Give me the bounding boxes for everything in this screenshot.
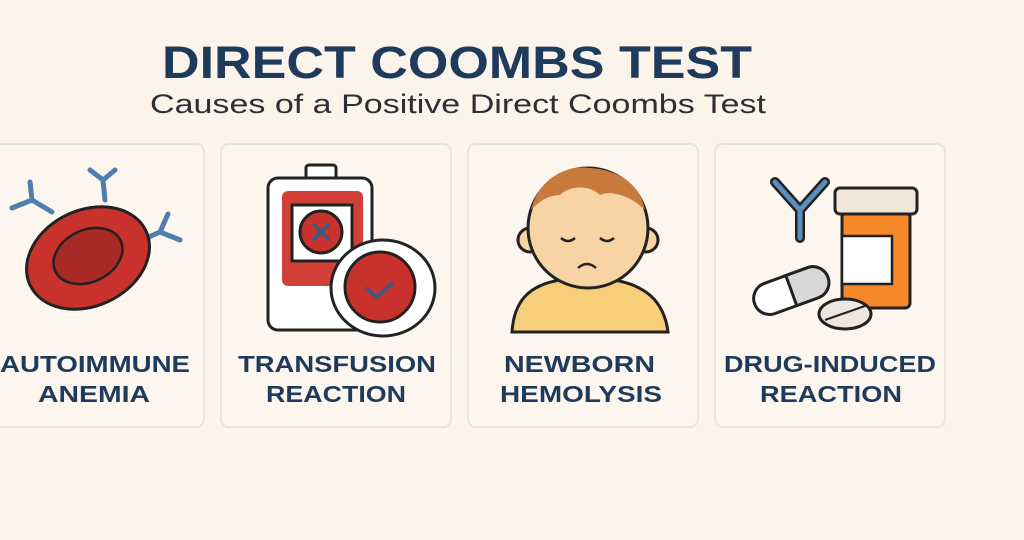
- label: DRUG-INDUCED: [724, 351, 936, 377]
- label: REACTION: [266, 381, 406, 407]
- subtitle: Causes of a Positive Direct Coombs Test: [150, 89, 767, 119]
- panel: transfusion reaction: [221, 144, 451, 427]
- label: ANEMIA: [38, 381, 150, 407]
- panel: drug-induced reaction: [715, 144, 945, 427]
- label: REACTION: [760, 381, 902, 407]
- icon: blood bag and cell: [268, 165, 435, 336]
- label: [238, 351, 436, 407]
- panel: autoimmune anemia: [0, 144, 204, 427]
- label: [500, 351, 662, 407]
- label: [0, 351, 190, 407]
- icon: baby: [512, 167, 668, 332]
- label: TRANSFUSION: [238, 351, 436, 377]
- label: NEWBORN: [504, 351, 655, 377]
- label: [724, 351, 936, 407]
- icon: red blood cell with antibodies: [10, 170, 180, 329]
- label: HEMOLYSIS: [500, 381, 662, 407]
- panel: newborn hemolysis: [468, 144, 698, 427]
- label: AUTOIMMUNE: [0, 351, 190, 377]
- title: DIRECT COOMBS TEST: [162, 37, 752, 88]
- icon: antibody, pill bottle, pills: [749, 182, 917, 329]
